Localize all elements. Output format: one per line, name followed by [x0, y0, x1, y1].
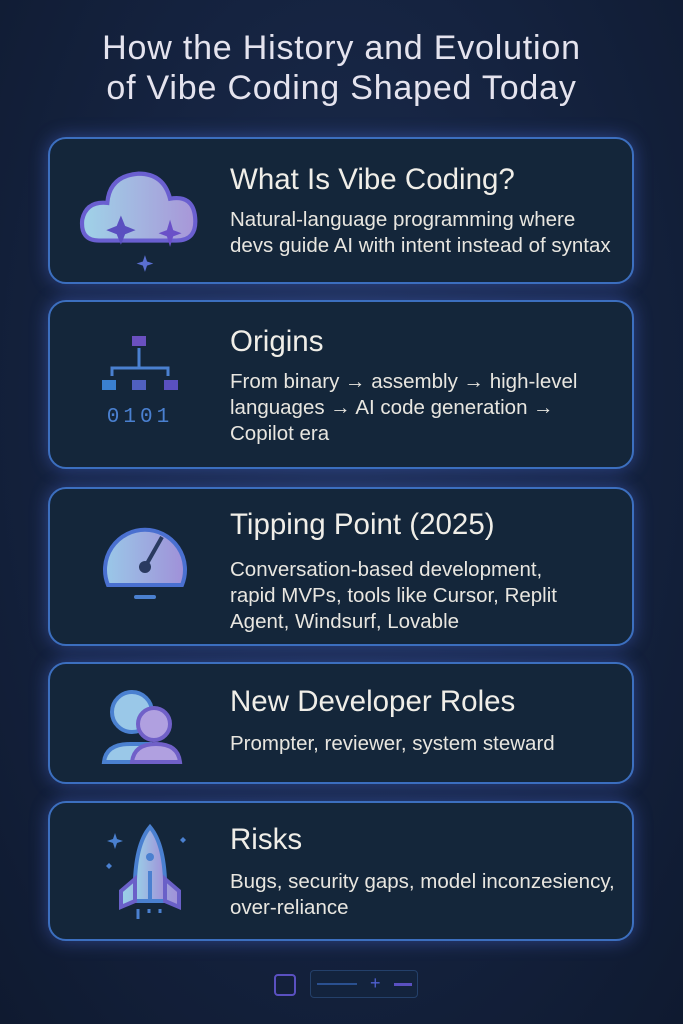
- title: of Vibe Coding Shaped Today: [106, 69, 577, 107]
- heading: Origins: [230, 325, 323, 358]
- title: [102, 29, 581, 107]
- text: Prompter, reviewer, system steward: [230, 732, 555, 755]
- text: [230, 558, 557, 633]
- text: rapid MVPs, tools like Cursor, Replit: [230, 584, 557, 607]
- text: [230, 870, 615, 919]
- panel: origins: [48, 300, 634, 469]
- text: languages → AI code generation →: [230, 396, 554, 419]
- icon: people: [102, 690, 182, 764]
- text: Copilot era: [230, 422, 329, 445]
- panel: tipping point: [48, 487, 634, 646]
- heading: Risks: [230, 823, 302, 856]
- panel: new developer roles: [48, 662, 634, 784]
- icon: rocket: [106, 824, 186, 919]
- footer controls: +: [370, 973, 381, 993]
- text: [230, 208, 611, 257]
- icon: gauge: [103, 528, 187, 599]
- text: Conversation-based development,: [230, 558, 542, 581]
- text: Bugs, security gaps, model inconzesiency,: [230, 870, 615, 893]
- text: Natural-language programming where: [230, 208, 575, 231]
- title: How the History and Evolution: [102, 29, 581, 67]
- heading: New Developer Roles: [230, 685, 515, 718]
- text: devs guide AI with intent instead of syntax: [230, 234, 611, 257]
- text: over-reliance: [230, 896, 348, 919]
- icon: hierarchy binary: 0101: [107, 406, 173, 429]
- text: [230, 370, 577, 445]
- icon: cloud: [80, 172, 198, 272]
- text: Agent, Windsurf, Lovable: [230, 610, 459, 633]
- icon: hierarchy binary: [102, 336, 178, 429]
- text: From binary → assembly → high-level: [230, 370, 577, 393]
- footer controls: [274, 970, 418, 998]
- panel: risks: [48, 801, 634, 941]
- panel: what is vibe coding: [48, 137, 634, 284]
- heading: Tipping Point (2025): [230, 508, 495, 541]
- heading: What Is Vibe Coding?: [230, 163, 515, 196]
